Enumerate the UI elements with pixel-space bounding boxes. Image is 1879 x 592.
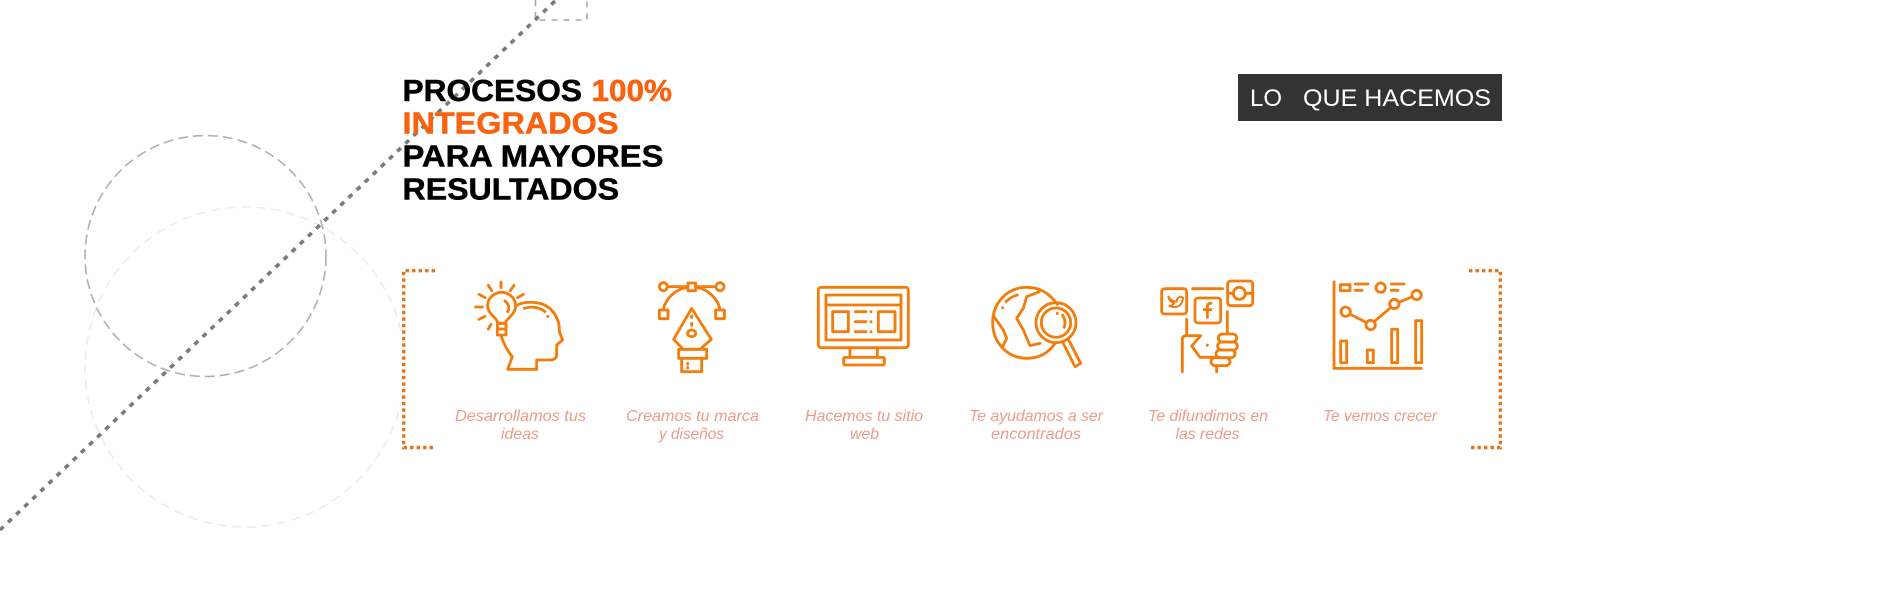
- caption: Hacemos tu sitio: [805, 408, 923, 425]
- service 3: website: [805, 287, 923, 443]
- title: RESULTADOS: [402, 172, 619, 206]
- title: 100%: [592, 73, 672, 108]
- icon: hand holding phone with social networks: [1162, 281, 1253, 372]
- icon: pen tool: [659, 283, 724, 372]
- service 5: social media: [1148, 281, 1268, 443]
- button: lo que hacemos: QUE HACEMOS: [1303, 85, 1491, 112]
- service 2: brand and design: [626, 283, 759, 443]
- service 4: search visibility: [969, 287, 1104, 443]
- icon: head with light bulb: [476, 282, 563, 369]
- caption: Te vemos crecer: [1323, 408, 1438, 425]
- caption: Desarrollamos tus: [455, 408, 586, 425]
- right dotted bracket: [1469, 271, 1500, 448]
- title: INTEGRADOS: [402, 106, 618, 140]
- icon: globe with magnifier: [993, 287, 1081, 367]
- caption: Te difundimos en: [1148, 408, 1268, 425]
- title: [402, 73, 672, 206]
- button: lo que hacemos: LO: [1250, 85, 1282, 112]
- caption: Creamos tu marca: [626, 408, 759, 425]
- caption: [455, 408, 586, 443]
- caption: [626, 408, 759, 443]
- caption: encontrados: [991, 426, 1081, 443]
- caption: [969, 408, 1104, 443]
- caption: y diseños: [658, 426, 724, 443]
- caption: web: [850, 426, 879, 443]
- left dotted bracket: [404, 271, 435, 448]
- title: PARA MAYORES: [402, 138, 664, 174]
- icon: line and bar chart: [1334, 281, 1422, 368]
- title: PROCESOS: [402, 73, 582, 108]
- caption: las redes: [1176, 426, 1240, 443]
- service 1: ideas: [455, 282, 586, 443]
- caption: Te ayudamos a ser: [969, 408, 1104, 425]
- caption: ideas: [501, 426, 539, 443]
- button: lo que hacemos: [1238, 74, 1502, 121]
- service 6: growth: [1323, 281, 1438, 425]
- background dashed geometry: [0, 0, 587, 530]
- icon: monitor: [818, 287, 908, 365]
- caption: [1148, 408, 1268, 443]
- caption: [805, 408, 923, 443]
